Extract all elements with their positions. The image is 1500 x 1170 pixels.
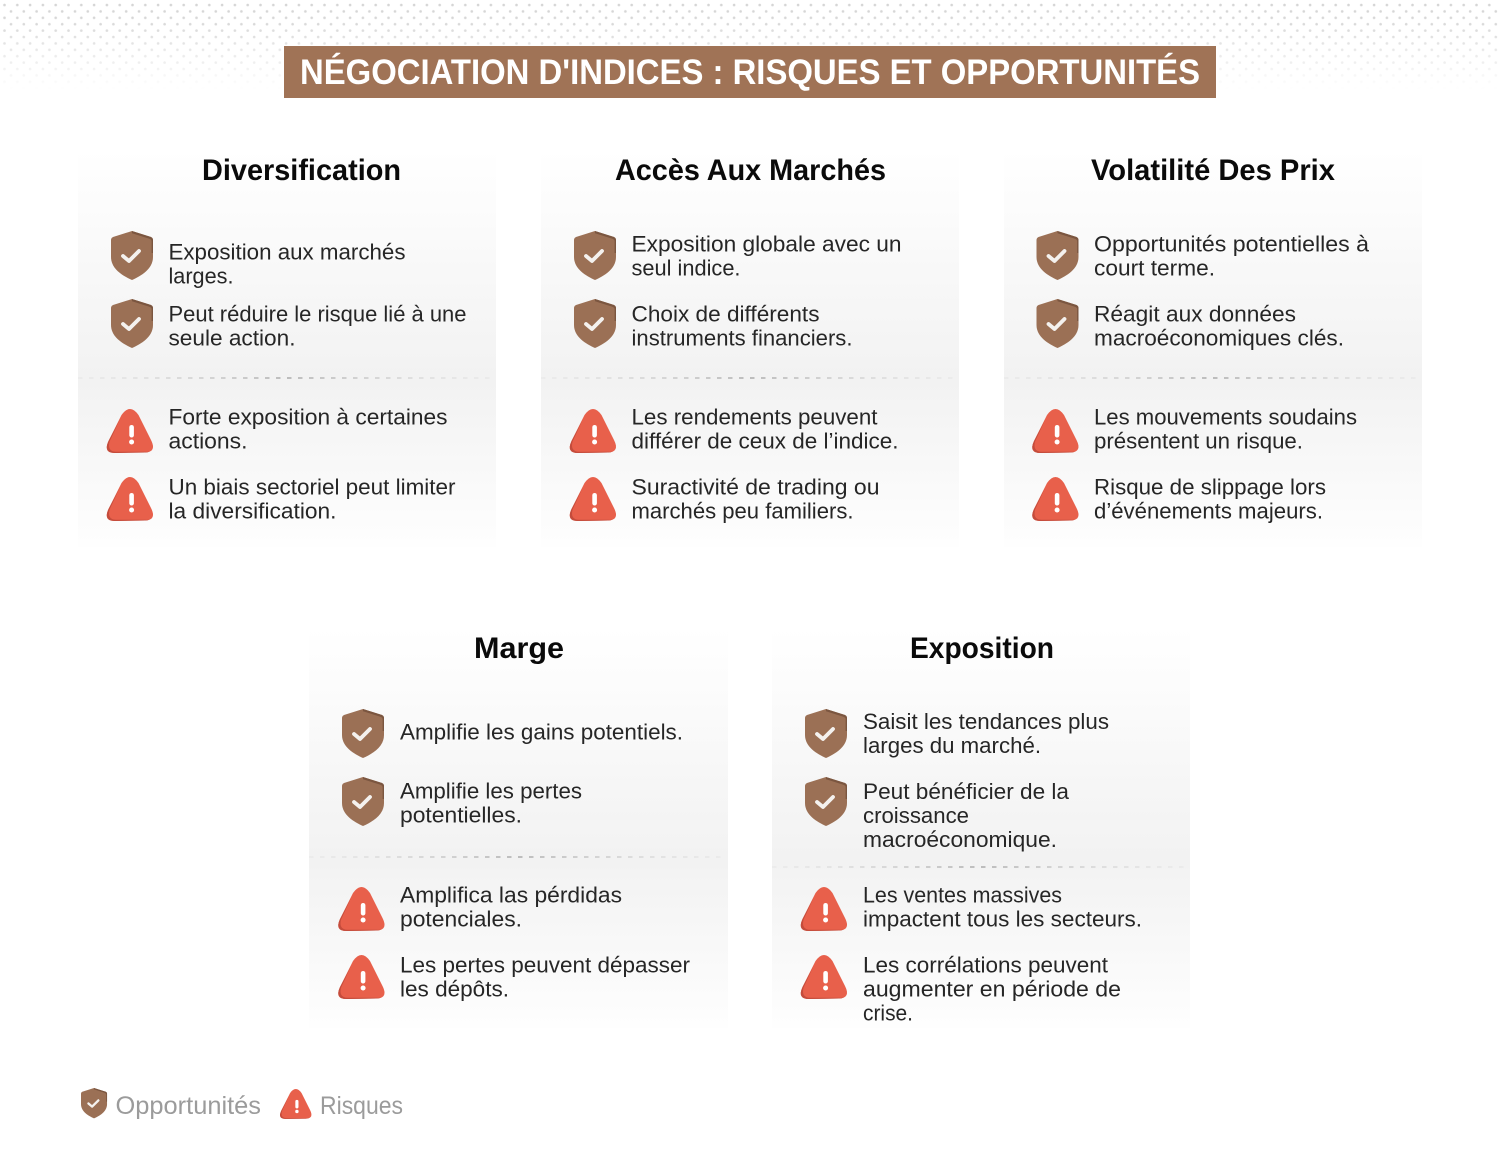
heading: Volatilité Des Prix: Volatilité Des Prix <box>1091 154 1335 187</box>
risk item 2 <box>801 952 1121 1026</box>
risk item 1: Les ventes massives <box>863 882 1062 908</box>
opportunity item 1: seul indice. <box>632 256 740 280</box>
opportunity item 1: Exposition aux marchés <box>168 240 406 264</box>
heading: Diversification: Diversification <box>202 154 401 187</box>
risk item 2 <box>107 474 456 524</box>
risk item 2: crise. <box>863 1000 913 1026</box>
risk item 1 <box>338 882 622 932</box>
opportunity item 2 <box>342 777 582 828</box>
risk item 2: Suractivité de trading ou <box>632 474 880 500</box>
risk item 1: Forte exposition à certaines <box>168 404 448 430</box>
panel: Exposition <box>772 628 1190 1028</box>
risk item 2 <box>1032 474 1326 524</box>
risk item 2: marchés peu familiers. <box>632 498 854 524</box>
heading: Accès Aux Marchés: Accès Aux Marchés <box>615 154 886 187</box>
risk item 1 <box>1032 404 1357 454</box>
risk item 2: la diversification. <box>168 498 336 524</box>
risk item 2: Risque de slippage lors <box>1094 474 1326 500</box>
risk item 1: Amplifica las pérdidas <box>400 882 622 908</box>
opportunity item 1 <box>805 709 1109 758</box>
opportunity item 2 <box>111 299 466 350</box>
opportunity item 1 <box>574 231 902 280</box>
opportunity item 1: Amplifie les gains potentiels. <box>400 720 683 744</box>
opportunity item 1: Saisit les tendances plus <box>863 709 1109 734</box>
icon: opportunity shield <box>81 1088 107 1118</box>
risk item 1: impactent tous les secteurs. <box>863 906 1142 932</box>
opportunity item 1: Opportunités potentielles à <box>1094 232 1370 256</box>
opportunity item 2: instruments financiers. <box>632 326 852 350</box>
panel: Marge <box>309 628 728 1028</box>
risk item 1 <box>107 404 448 454</box>
risk item 2: Un biais sectoriel peut limiter <box>168 474 456 500</box>
risk item 2 <box>338 952 690 1002</box>
opportunity item 1: larges. <box>168 264 234 288</box>
risk item 1 <box>801 882 1142 932</box>
opportunity item 1: court terme. <box>1094 256 1215 280</box>
panel: Volatilité Des Prix <box>1004 150 1422 547</box>
risk item 2: les dépôts. <box>400 976 509 1002</box>
panel: Accès Aux Marchés <box>541 150 959 547</box>
opportunity item 1 <box>111 231 406 288</box>
opportunity item 2: croissance <box>863 803 969 828</box>
opportunity item 2: Peut réduire le risque lié à une <box>168 302 466 326</box>
opportunity item 2: macroéconomique. <box>863 827 1057 852</box>
opportunity item 2: potentielles. <box>400 802 522 828</box>
opportunity item 1: larges du marché. <box>863 733 1041 758</box>
heading: Marge: Marge <box>474 632 564 665</box>
opportunity item 2 <box>574 299 852 350</box>
risk item 2 <box>570 474 880 524</box>
risk item 1: actions. <box>168 428 248 454</box>
opportunity item 2 <box>1036 299 1344 350</box>
legend <box>81 1088 403 1120</box>
risk item 1: présentent un risque. <box>1094 428 1303 454</box>
opportunity item 2: macroéconomiques clés. <box>1094 326 1344 350</box>
opportunity item 1 <box>342 709 683 758</box>
risk item 1: potenciales. <box>400 906 522 932</box>
opportunity item 2: Réagit aux données <box>1094 302 1296 326</box>
risk item 1 <box>570 404 898 454</box>
opportunity item 2: Choix de différents <box>632 302 820 326</box>
risk item 2: Les corrélations peuvent <box>863 952 1108 978</box>
opportunity item 2: seule action. <box>168 326 296 350</box>
risk item 2: d’événements majeurs. <box>1094 498 1323 524</box>
panel: Diversification <box>78 150 496 547</box>
icon: risk triangle <box>280 1089 311 1119</box>
opportunity item 1 <box>1036 231 1370 280</box>
opportunity item 2: Amplifie les pertes <box>400 778 582 804</box>
heading: Exposition: Exposition <box>910 632 1054 665</box>
opportunity item 2 <box>805 777 1070 852</box>
risk item 1: Les mouvements soudains <box>1094 404 1357 430</box>
legend label: Risques: Risques <box>320 1092 403 1120</box>
risk item 2: Les pertes peuvent dépasser <box>400 952 690 978</box>
opportunity item 1: Exposition globale avec un <box>632 232 902 256</box>
risk item 1: Les rendements peuvent <box>632 404 878 430</box>
legend label: Opportunités: Opportunités <box>116 1092 261 1120</box>
opportunity item 2: Peut bénéficier de la <box>863 779 1070 804</box>
risk item 1: différer de ceux de l’indice. <box>632 428 898 454</box>
risk item 2: augmenter en période de <box>863 976 1121 1002</box>
title: NÉGOCIATION D'INDICES : RISQUES ET OPPORTUNITÉS <box>300 52 1200 92</box>
